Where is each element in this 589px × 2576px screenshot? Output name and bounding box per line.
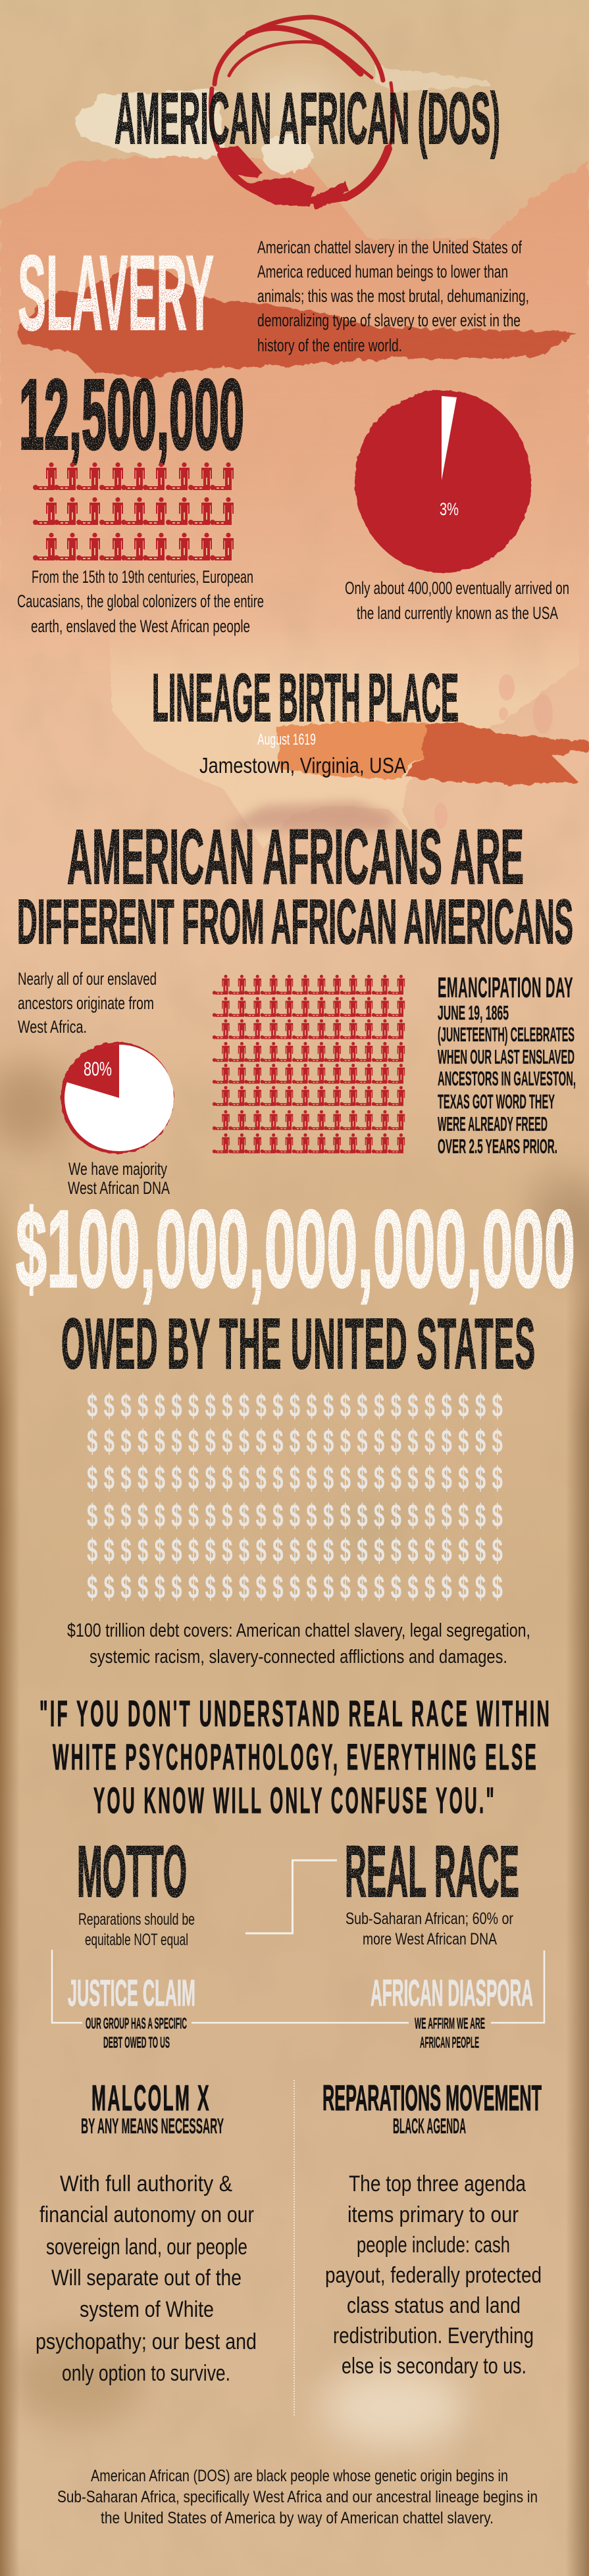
pictogram: rows of dollar signs: $$$$$$$$$$$$$$$$$$$$$$$$$ bbox=[87, 1387, 509, 1424]
text block: majority dna bbox=[68, 1159, 170, 1198]
place: jamestown: Jamestown, Virginia, USA bbox=[199, 753, 406, 778]
text block: majority dna: West African DNA bbox=[68, 1178, 170, 1198]
text block: 400,000 arrived bbox=[345, 578, 569, 623]
text: MALCOLM X bbox=[91, 2077, 211, 2118]
text block: slavery description bbox=[257, 237, 529, 355]
text: SLAVERY bbox=[18, 234, 214, 353]
text block: malcolm x paragraph: only option to survive. bbox=[62, 2361, 230, 2386]
text block: real race description bbox=[346, 1910, 513, 1948]
pictogram: rows of dollar signs: $$$$$$$$$$$$$$$$$$$$$$$$$ bbox=[87, 1569, 509, 1606]
text block: motto description: Reparations should be bbox=[78, 1910, 195, 1929]
pie chart: 80 percent bbox=[61, 1042, 174, 1154]
icon: blood ring bbox=[211, 17, 394, 209]
text block: malcolm x paragraph: With full authority & bbox=[60, 2171, 232, 2196]
text block: emancipation day bbox=[438, 972, 576, 1158]
paint: cream brush strokes behind title bbox=[75, 66, 490, 174]
text block: debt coverage bbox=[67, 1620, 530, 1668]
text block: malcolm x paragraph: sovereign land, our people bbox=[46, 2235, 247, 2260]
date: august 1619: August 1619 bbox=[257, 731, 316, 749]
text block: west african origin: Nearly all of our enslaved bbox=[18, 969, 157, 989]
text block: enslaved west african people: Caucasians, the global colonizers of the entire bbox=[17, 591, 264, 611]
text block: motto description: equitable NOT equal bbox=[85, 1931, 188, 1949]
text block: real race description: more West African DNA bbox=[363, 1930, 497, 1948]
text: AFRICAN PEOPLE bbox=[420, 2034, 479, 2052]
text block: malcolm x paragraph: system of White bbox=[80, 2297, 214, 2322]
pie chart: 80 percent: 80% bbox=[84, 1058, 112, 1080]
text block: reparations movement paragraph: The top three agenda bbox=[349, 2171, 526, 2196]
splatter: pink marks bbox=[434, 674, 553, 829]
text block: enslaved west african people: From the 15th to 19th centuries, European bbox=[32, 567, 253, 587]
text block: malcolm x paragraph: financial autonomy on our bbox=[39, 2202, 254, 2227]
text block: enslaved west african people: earth, enslaved the West African people bbox=[31, 616, 250, 636]
pictogram: chained people, three rows bbox=[33, 462, 234, 560]
text block: closing definition bbox=[57, 2467, 538, 2527]
text block: malcolm x paragraph: Will separate out of the bbox=[51, 2266, 242, 2291]
text: WE AFFIRM WE ARE bbox=[415, 2015, 485, 2033]
text block: west african origin: ancestors originate from bbox=[18, 993, 154, 1013]
pictogram: chained people grid bbox=[213, 975, 405, 1153]
pie chart: 3 percent bbox=[355, 390, 531, 573]
pictogram: rows of dollar signs: $$$$$$$$$$$$$$$$$$$$$$$$$ bbox=[87, 1423, 509, 1460]
text: BY ANY MEANS NECESSARY bbox=[81, 2114, 224, 2138]
text: 12,500,000 bbox=[19, 359, 244, 470]
text block: malcolm x paragraph: psychopathy; our best and bbox=[36, 2329, 257, 2354]
text block: african diaspora description bbox=[415, 2015, 485, 2052]
text block: majority dna: We have majority bbox=[68, 1159, 167, 1179]
text block: reparations movement paragraph: else is secondary to us. bbox=[342, 2354, 526, 2379]
pictogram: rows of dollar signs bbox=[87, 1387, 509, 1606]
text block: justice claim description bbox=[86, 2015, 187, 2052]
text block: emancipation day: JUNE 19, 1865 bbox=[438, 1001, 509, 1024]
text block: reparations movement paragraph: payout, federally protected bbox=[325, 2263, 542, 2288]
pictogram: rows of dollar signs: $$$$$$$$$$$$$$$$$$$$$$$$$ bbox=[87, 1460, 509, 1497]
text block: enslaved west african people bbox=[17, 567, 264, 636]
paint: red-orange brush stroke behind slavery bbox=[15, 267, 575, 378]
text block: debt coverage: systemic racism, slavery-connected afflictions and damages. bbox=[90, 1647, 507, 1668]
text block: justice claim description: DEBT OWED TO US bbox=[103, 2034, 170, 2052]
connector: motto to real race bbox=[245, 1860, 337, 1933]
text: JUSTICE CLAIM bbox=[68, 1972, 195, 2014]
pie chart: 3 percent: 3% bbox=[440, 499, 459, 519]
text block: reparations movement paragraph: class status and land bbox=[347, 2293, 521, 2318]
text block: reparations movement paragraph: people include: cash bbox=[357, 2233, 510, 2258]
text block: malcolm x paragraph bbox=[36, 2171, 257, 2386]
pictogram: rows of dollar signs: $$$$$$$$$$$$$$$$$$$$$$$$$ bbox=[87, 1532, 509, 1569]
text block: motto description bbox=[78, 1910, 195, 1949]
divider: dotted vertical line bbox=[294, 2080, 295, 2415]
text block: west african origin bbox=[18, 969, 157, 1037]
text block: west african origin: West Africa. bbox=[18, 1017, 87, 1037]
bracket: justice claim to african diaspora bbox=[52, 1950, 544, 2023]
text: OUR GROUP HAS A SPECIFIC bbox=[86, 2015, 187, 2033]
text block: slavery description: history of the entire world. bbox=[257, 335, 402, 355]
text: BLACK AGENDA bbox=[393, 2114, 466, 2138]
paint: orange brush stroke behind lineage bbox=[276, 721, 589, 784]
text block: reparations movement paragraph: redistribution. Everything bbox=[333, 2323, 534, 2348]
quote bbox=[39, 1693, 551, 1821]
text block: reparations movement paragraph bbox=[325, 2171, 542, 2379]
pictogram: rows of dollar signs: $$$$$$$$$$$$$$$$$$$$$$$$$ bbox=[87, 1497, 509, 1534]
text block: real race description: Sub-Saharan African; 60% or bbox=[346, 1910, 513, 1928]
text block: closing definition: the United States of America by way of American chattel slavery. bbox=[101, 2509, 494, 2527]
text block: reparations movement paragraph: items primary to our bbox=[347, 2202, 519, 2227]
text: MOTTO bbox=[77, 1831, 187, 1912]
